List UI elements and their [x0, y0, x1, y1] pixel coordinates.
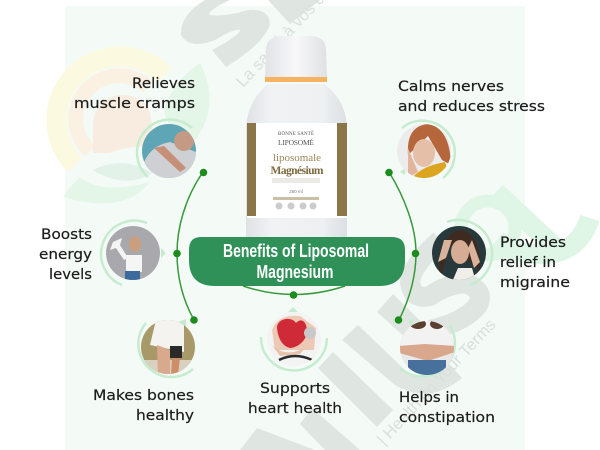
label [247, 123, 347, 218]
benefit: migraine: relief in [500, 255, 556, 271]
benefit: heart: Supports [260, 381, 330, 397]
watermark shapes [181, 0, 480, 450]
benefit: constipation [399, 318, 495, 426]
benefit: muscle cramps [74, 76, 196, 178]
benefit: calms nerves: Calms nerves [398, 79, 504, 95]
benefit: calms nerves: and reduces stress [398, 99, 545, 115]
product bottle [246, 36, 347, 238]
faded logo: right [461, 192, 590, 255]
benefit: muscle cramps: Relieves [132, 76, 195, 92]
label: LIPOSOMÉ [278, 137, 314, 147]
central title pill [189, 237, 405, 286]
label: BONNE SANTÉ [278, 131, 314, 137]
benefit: migraine: Provides [500, 235, 566, 251]
label: liposomale [273, 152, 321, 164]
benefit: heart [248, 307, 342, 417]
benefit: bones: healthy [136, 408, 194, 424]
benefit: bones [93, 319, 196, 424]
benefit: migraine: migraine [500, 275, 570, 291]
central title pill: Benefits of Liposomal [223, 240, 369, 261]
benefit: migraine [432, 220, 570, 291]
watermark tagline: bottom: | Health on Your Terms [374, 316, 499, 449]
benefit: calms nerves [397, 79, 545, 178]
benefit: muscle cramps: muscle cramps [74, 96, 195, 112]
benefit: heart: heart health [248, 401, 342, 417]
benefit: constipation: Helps in [399, 390, 459, 406]
faded logo: left [56, 56, 210, 203]
benefit: energy levels: Boosts [41, 227, 92, 243]
central title pill: Magnesium [256, 261, 334, 282]
benefit: energy levels [39, 221, 166, 285]
benefit: energy levels: levels [49, 267, 92, 283]
label: 250 ml [289, 189, 303, 194]
benefit: bones: Makes bones [93, 388, 194, 404]
label: Magnésium [270, 165, 324, 177]
connector dots [173, 169, 419, 324]
background panel [65, 6, 525, 450]
connector arcs [177, 172, 416, 320]
benefit: constipation: constipation [399, 410, 495, 426]
benefit: energy levels: energy [39, 247, 92, 263]
